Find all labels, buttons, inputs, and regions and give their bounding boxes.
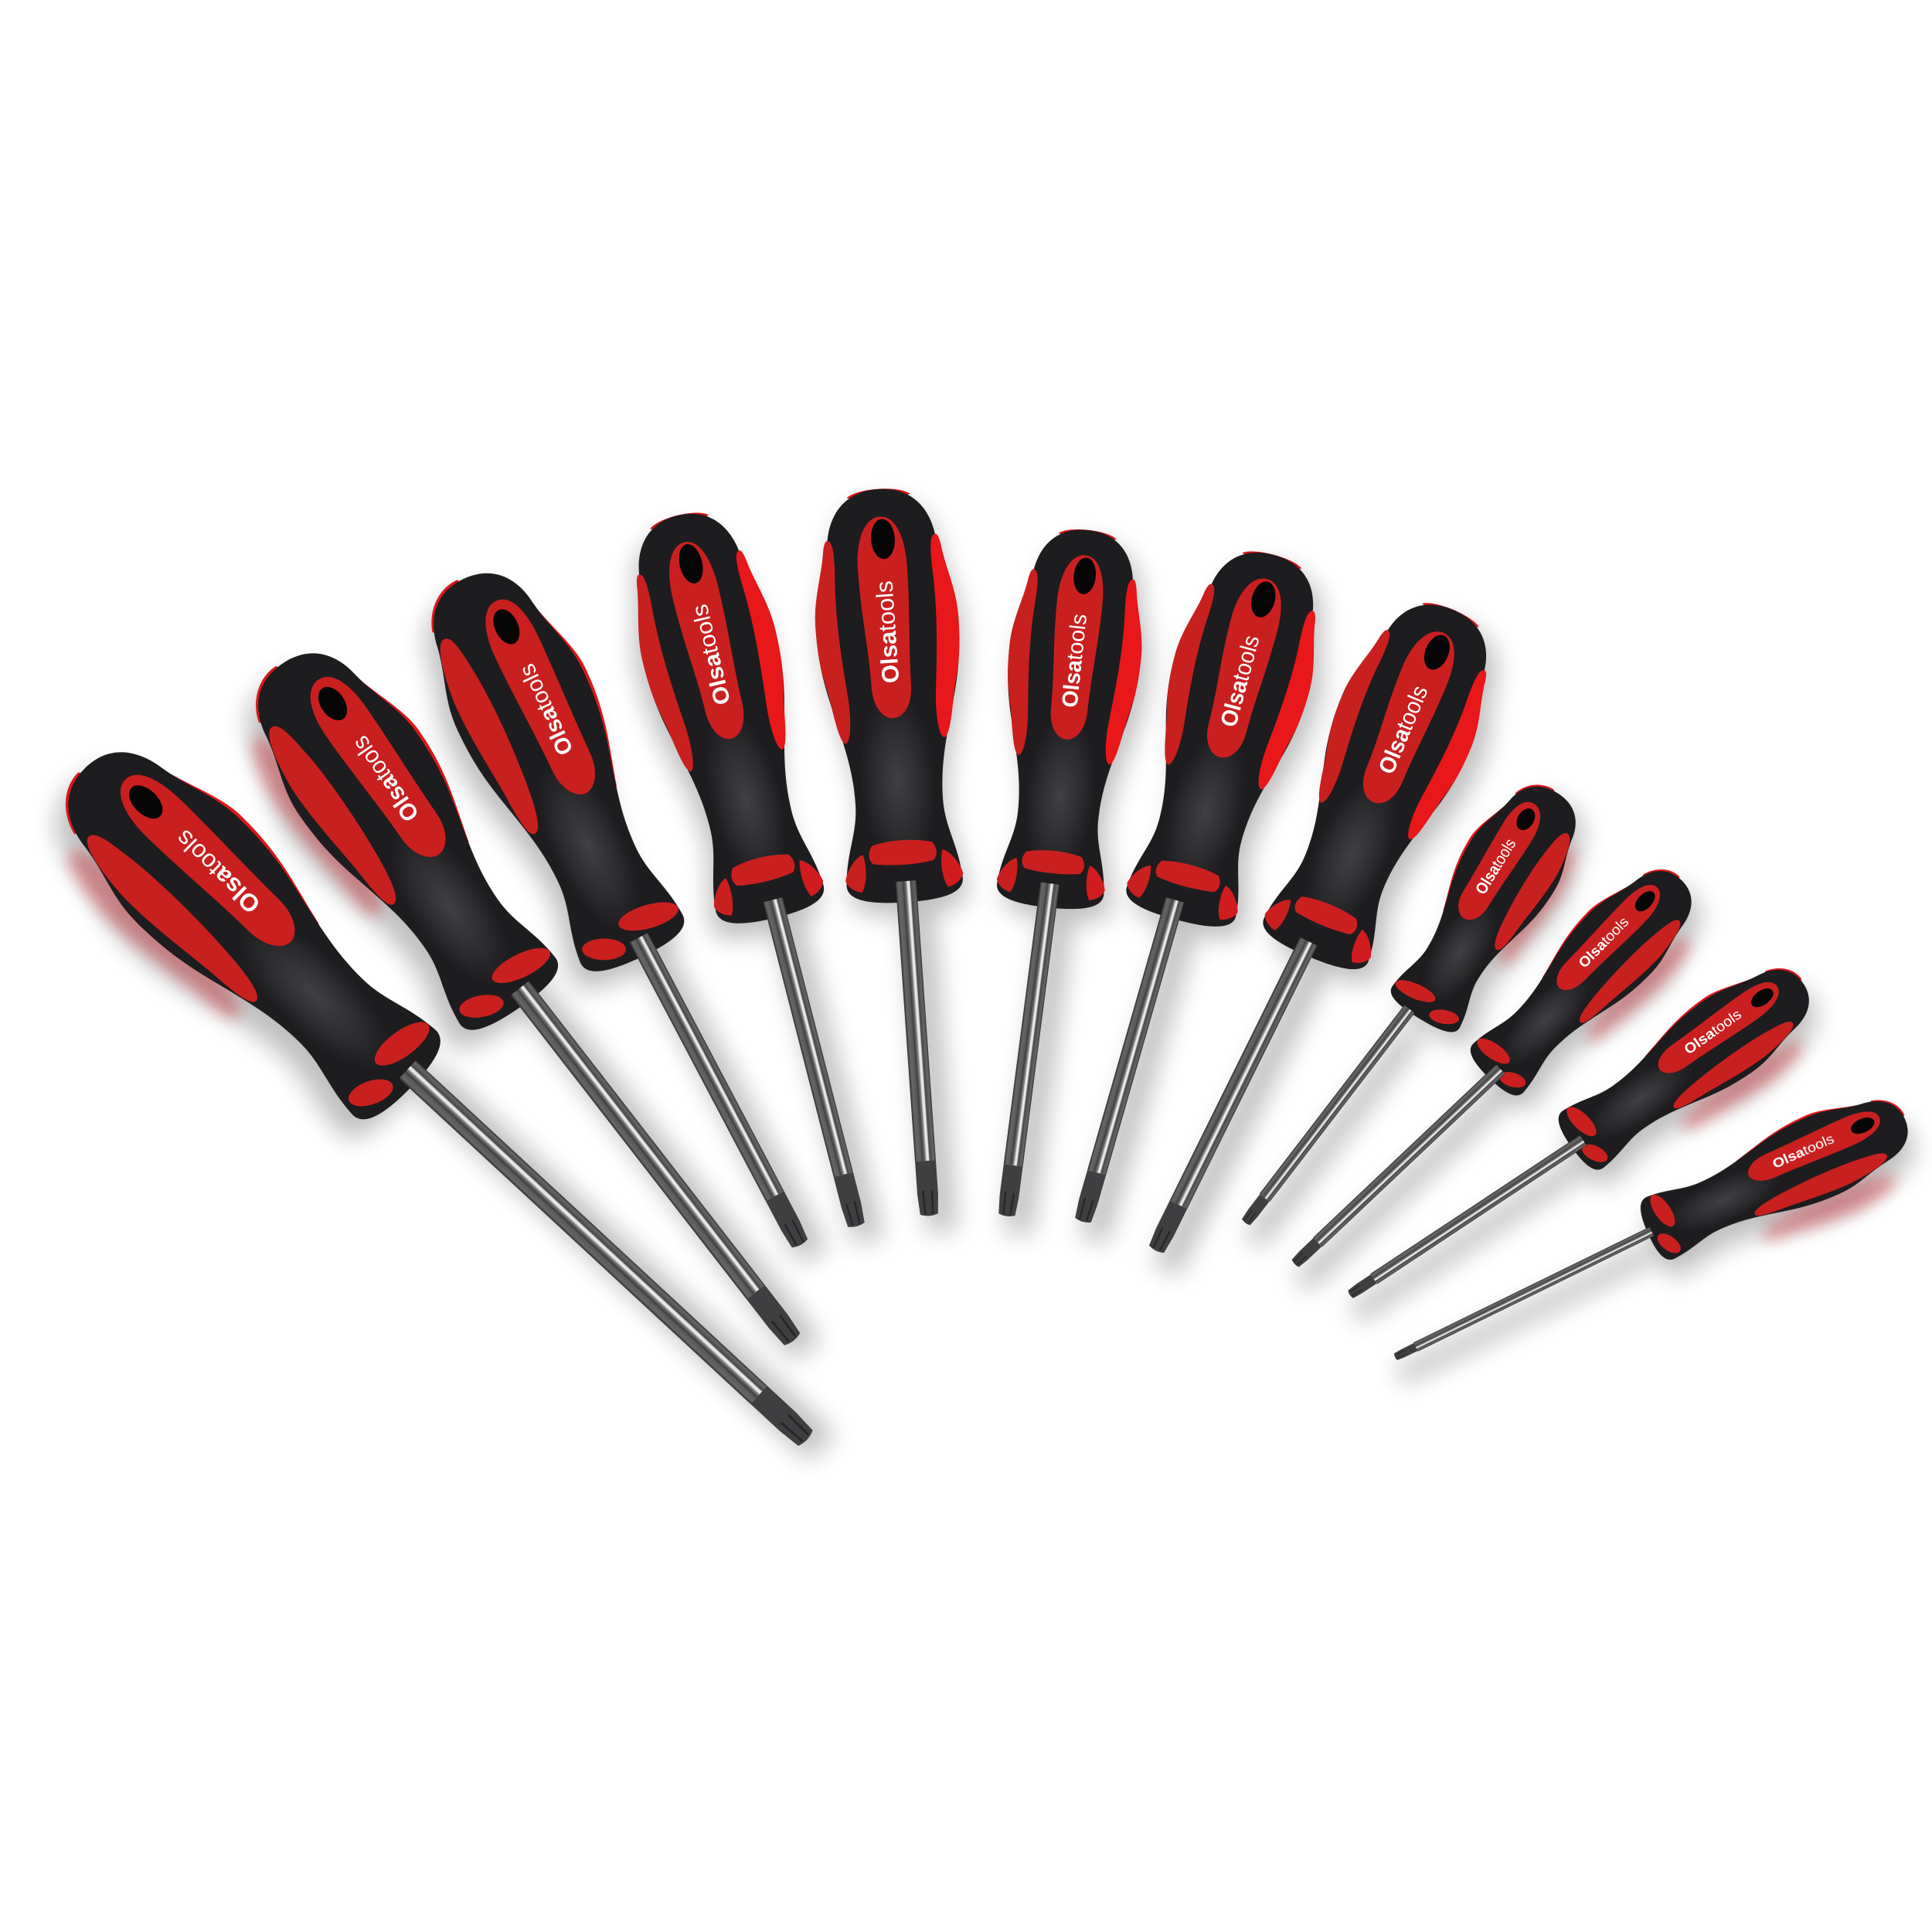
- screwdriver 1: [32, 713, 815, 1449]
- soft cast shadows: [21, 497, 1928, 1461]
- brand text 12: Olsatools: [1770, 1131, 1836, 1172]
- shaft 1: [399, 1060, 815, 1449]
- handle 12: [1630, 1079, 1923, 1271]
- screwdriver 9: [1240, 765, 1599, 1227]
- handle 5: [806, 484, 978, 907]
- shaft 12: [1393, 1227, 1654, 1362]
- handle 6: [983, 523, 1154, 914]
- shaft 7: [1073, 897, 1184, 1224]
- screwdriver 10: [1290, 848, 1713, 1269]
- shaft 11: [1346, 1135, 1587, 1300]
- handle 7: [1109, 537, 1341, 937]
- screwdriver 8: [1147, 583, 1517, 1255]
- brand text 4: Olsatools: [686, 602, 736, 708]
- brand text 10: Olsatools: [1576, 914, 1632, 971]
- brand text 2: Olsatools: [346, 731, 424, 827]
- handle 10: [1457, 848, 1713, 1108]
- handle 11: [1546, 946, 1829, 1182]
- brand text 6: Olsatools: [1058, 613, 1092, 709]
- shaft 4: [763, 897, 866, 1229]
- handle 9: [1376, 765, 1599, 1044]
- brand text 1: Olsatools: [171, 825, 266, 918]
- shaft 8: [1147, 937, 1318, 1255]
- screwdriver 3: [400, 546, 810, 1250]
- shaft 5: [896, 880, 940, 1216]
- shaft 3: [629, 933, 810, 1250]
- shaft 10: [1290, 1064, 1505, 1269]
- screwdriver 4: [611, 499, 866, 1229]
- brand text 8: Olsatools: [1374, 682, 1434, 777]
- screwdriver 11: [1346, 946, 1829, 1300]
- handle 2: [222, 620, 581, 1049]
- screwdriver 6: [983, 523, 1154, 1217]
- screwdriver 5: [806, 484, 978, 1216]
- screwdriver 2: [222, 620, 803, 1348]
- red floor reflections: [56, 728, 1901, 1250]
- handle 1: [32, 713, 464, 1140]
- brand text 3: Olsatools: [514, 660, 578, 760]
- handle 3: [400, 546, 706, 987]
- shaft 2: [511, 981, 803, 1348]
- screwdriver 12: [1393, 1079, 1923, 1362]
- screwdriver 7: [1073, 537, 1341, 1224]
- handle 4: [611, 499, 841, 934]
- brand text 5: Olsatools: [870, 580, 904, 684]
- brand text 9: Olsatools: [1472, 835, 1519, 898]
- handle 8: [1245, 583, 1517, 984]
- brand text 7: Olsatools: [1216, 633, 1265, 730]
- shaft 6: [997, 882, 1060, 1217]
- shaft 9: [1240, 1005, 1415, 1227]
- brand text 11: Olsatools: [1681, 1006, 1745, 1058]
